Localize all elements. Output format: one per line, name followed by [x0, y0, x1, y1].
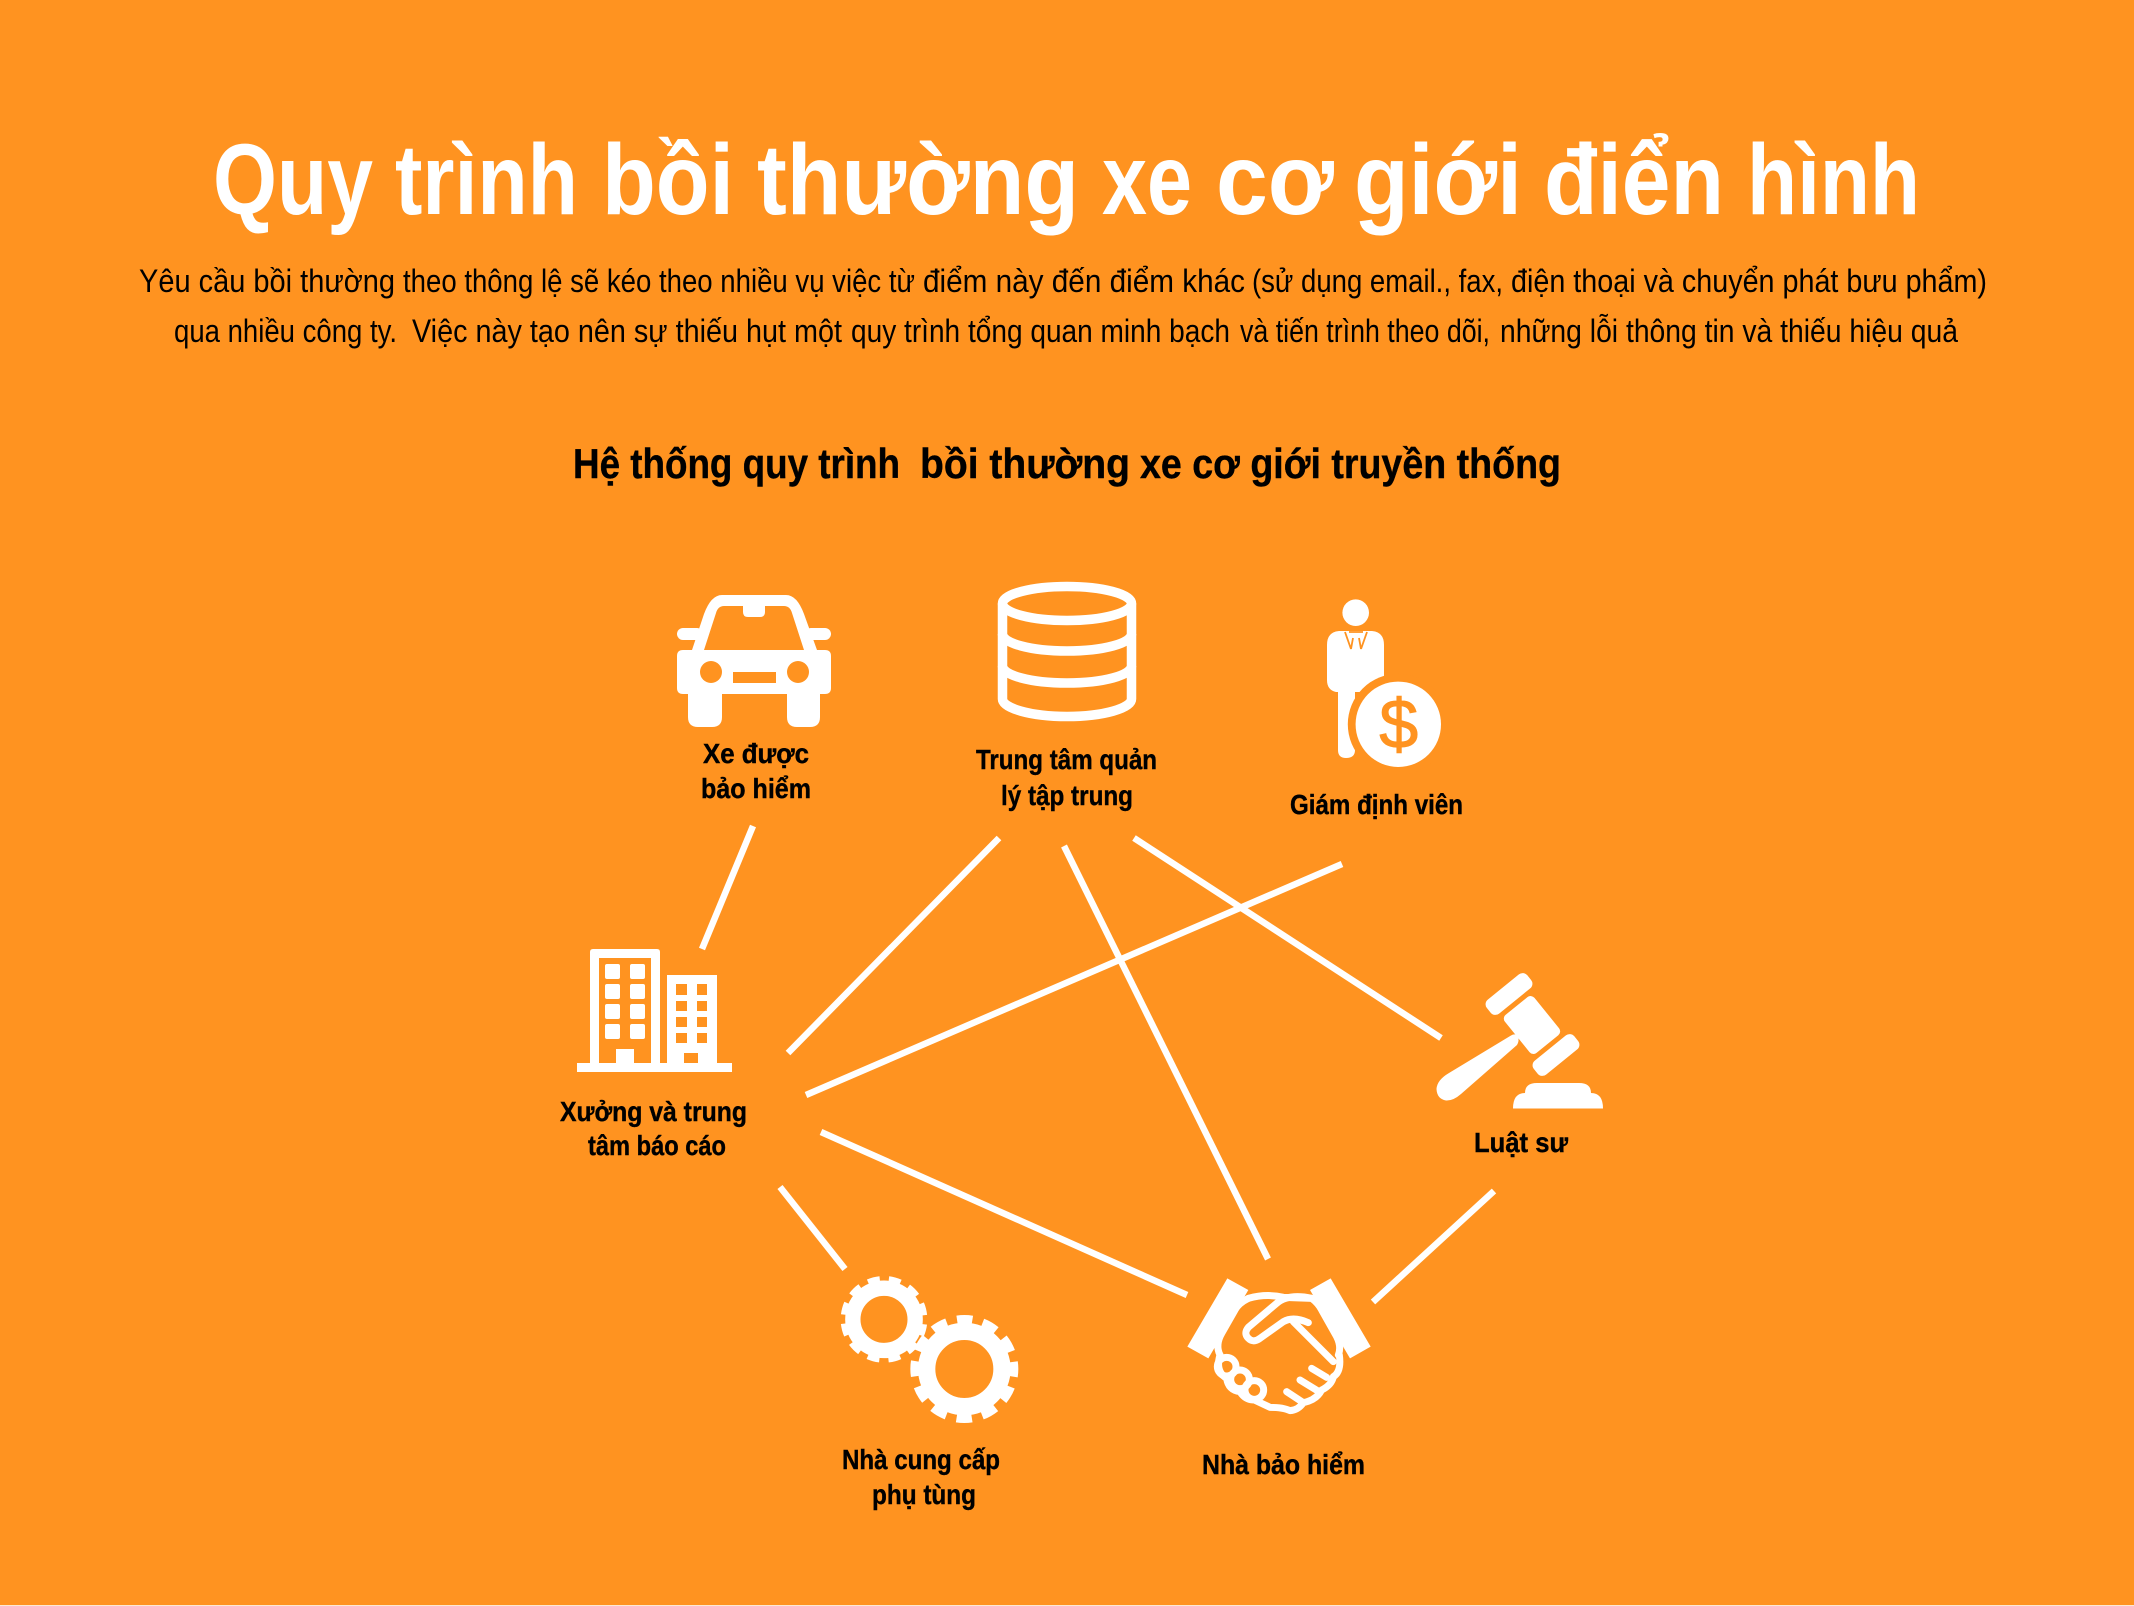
- section heading: Hệ thống quy trình: [573, 440, 900, 487]
- section heading: [573, 440, 1561, 487]
- node: workshop and reporting centre: [560, 949, 747, 1161]
- icon: person with dollar coin: [1327, 599, 1449, 775]
- title: [213, 124, 1920, 236]
- title: bồi: [602, 124, 734, 236]
- title: xe: [1102, 124, 1192, 236]
- icon: handshake: [1187, 1278, 1371, 1411]
- label: tâm báo cáo: [588, 1130, 726, 1161]
- label: Giám định viên: [1290, 789, 1463, 820]
- intro text block: theo thông lệ sẽ kéo theo nhiều vụ việc từ: [403, 263, 915, 299]
- icon: person with dollar coin: $: [1379, 685, 1418, 763]
- label: Luật sư: [1474, 1127, 1569, 1158]
- section heading: xe cơ giới truyền thống: [1140, 440, 1561, 487]
- label: Trung tâm quản: [976, 744, 1157, 775]
- intro text block: Việc này tạo nên sự thiếu hụt một: [412, 313, 842, 349]
- icon: gears: [835, 1270, 1014, 1418]
- title: giới: [1354, 124, 1522, 236]
- label: bảo hiểm: [701, 773, 811, 804]
- label: [842, 1444, 1000, 1510]
- label: [701, 738, 811, 804]
- label: Nhà cung cấp: [842, 1444, 1000, 1475]
- intro text block: Yêu cầu bồi thường: [139, 263, 395, 299]
- icon: car: [677, 595, 831, 727]
- title: Quy: [213, 124, 373, 236]
- node: central management centre: [976, 586, 1157, 811]
- title: trình: [395, 124, 578, 236]
- section heading: bồi thường: [920, 440, 1130, 487]
- title: hình: [1747, 124, 1920, 236]
- label: phụ tùng: [872, 1479, 976, 1510]
- intro text block: [139, 263, 1987, 349]
- title: cơ: [1216, 124, 1335, 236]
- connection lines: [702, 826, 1494, 1302]
- label: Xe được: [703, 738, 809, 769]
- intro text block: và tiến trình theo dõi,: [1240, 313, 1490, 349]
- node: insurer: [1187, 1278, 1371, 1480]
- intro text block: qua nhiều công ty.: [174, 313, 397, 349]
- title: điển: [1544, 124, 1724, 236]
- node: insured car: [677, 595, 831, 804]
- node: parts supplier: [835, 1270, 1014, 1510]
- intro text block: quy trình tổng quan minh bạch: [851, 313, 1230, 349]
- icon: buildings: [577, 949, 732, 1072]
- label: [560, 1096, 747, 1161]
- title: thường: [757, 124, 1079, 236]
- label: Nhà bảo hiểm: [1202, 1449, 1365, 1480]
- node: lawyer: [1436, 971, 1603, 1158]
- label: lý tập trung: [1001, 780, 1133, 811]
- label: [976, 744, 1157, 811]
- intro text block: những lỗi thông tin và thiếu hiệu quả: [1500, 312, 1959, 349]
- intro text block: điểm này đến điểm khác: [923, 263, 1245, 299]
- icon: database: [1002, 586, 1132, 716]
- icon: gavel: [1436, 971, 1603, 1108]
- intro text block: (sử dụng email., fax,: [1252, 263, 1503, 299]
- node: assessor: [1290, 599, 1463, 820]
- intro text block: điện thoại và chuyển phát bưu phẩm): [1511, 263, 1987, 299]
- label: Xưởng và trung: [560, 1096, 747, 1127]
